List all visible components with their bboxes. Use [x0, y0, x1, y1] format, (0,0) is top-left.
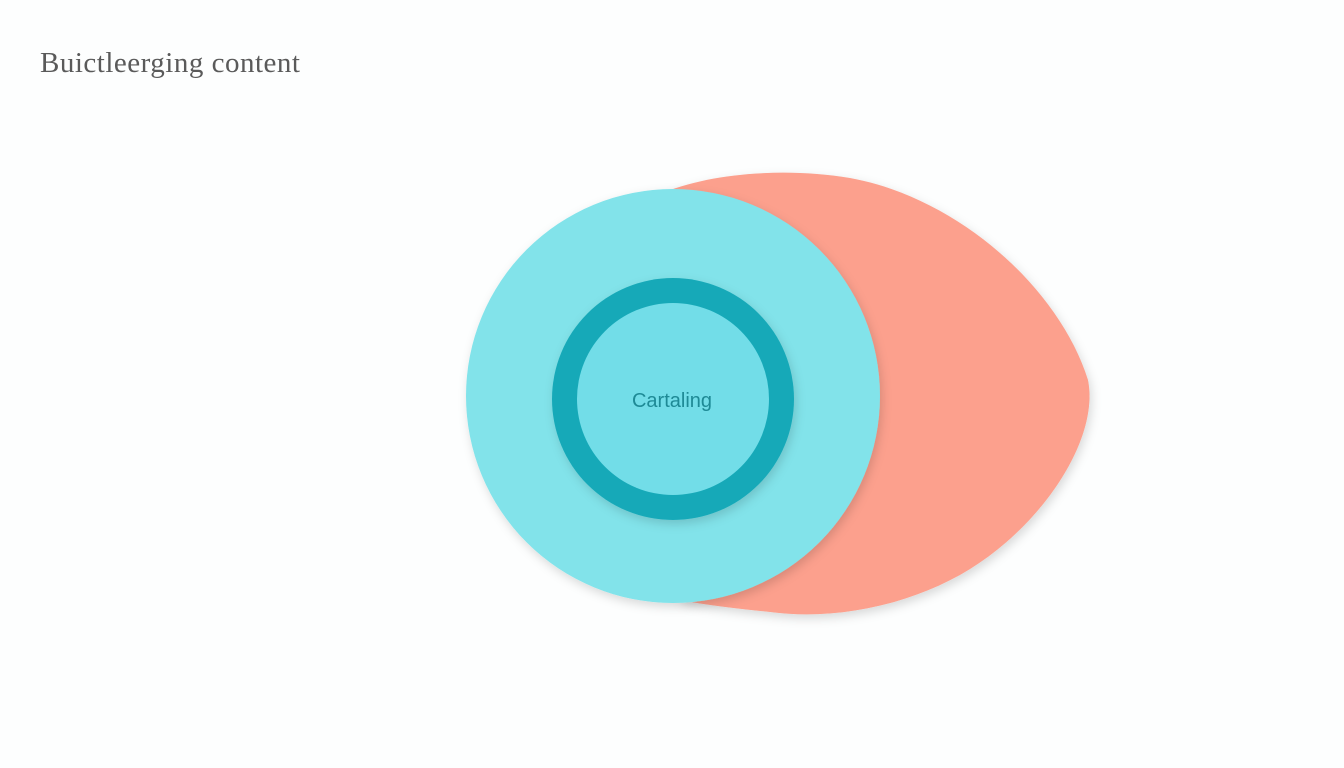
cyan outer circle [466, 189, 880, 603]
center label: Cartaling [632, 390, 712, 412]
title: Buictleerging content [40, 47, 300, 79]
teal ring [552, 278, 794, 520]
salmon shape [670, 173, 1090, 614]
